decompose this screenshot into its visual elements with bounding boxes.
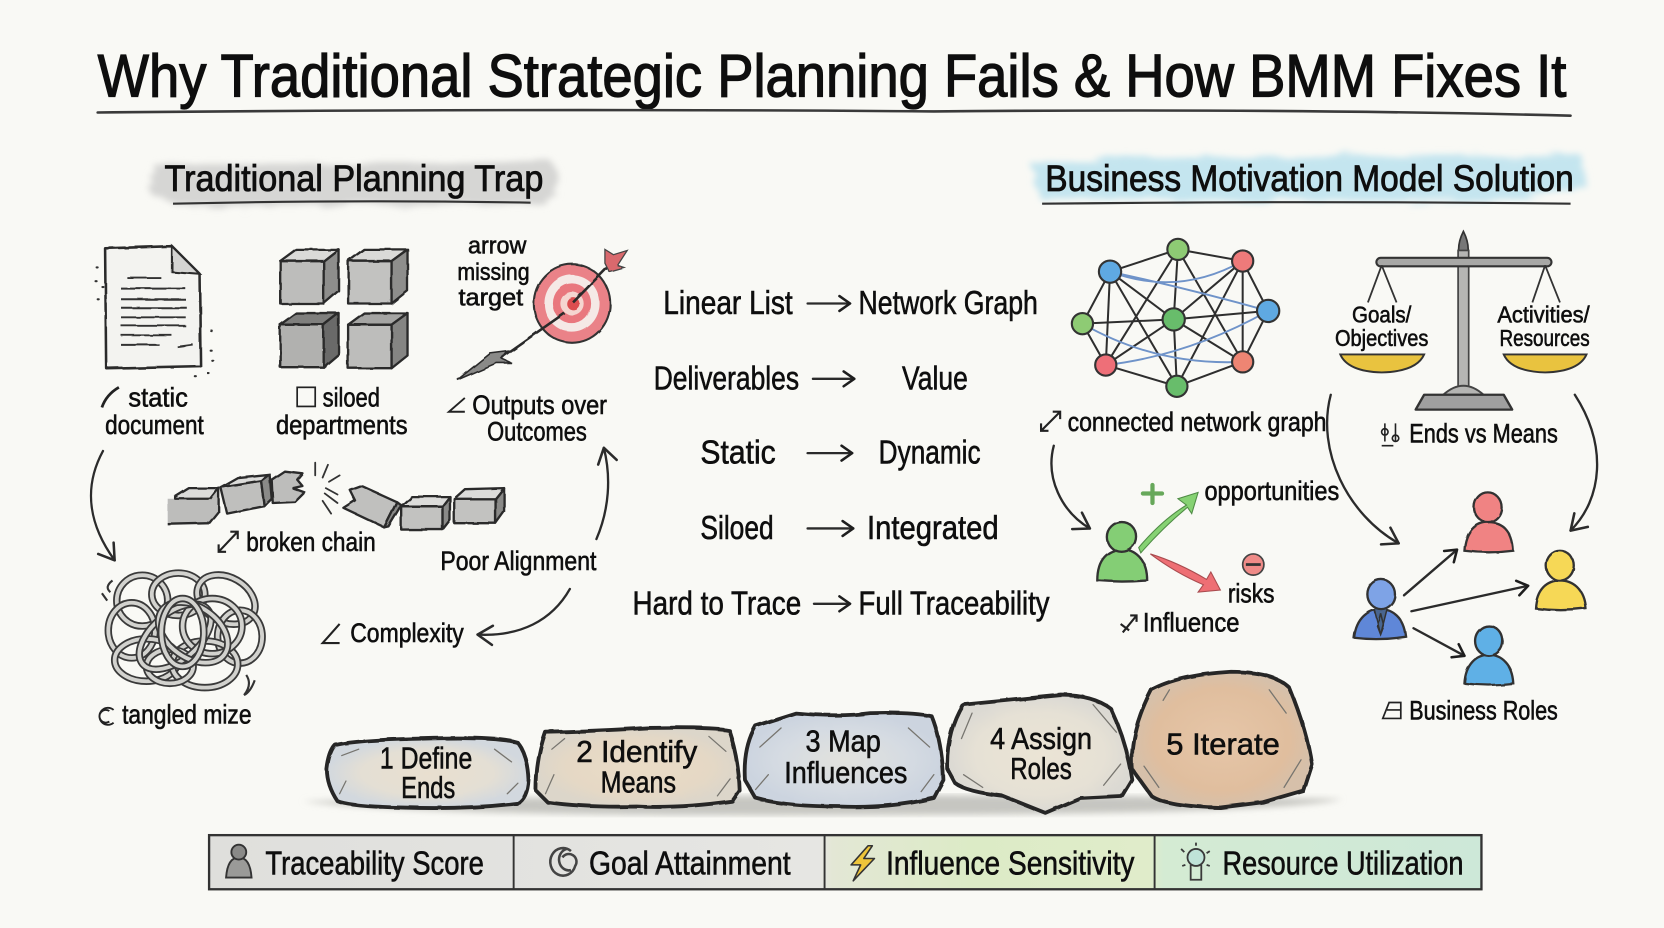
arrow: opportunities <box>1139 492 1198 553</box>
row: Linear List to Network Graph: Linear List <box>663 284 793 321</box>
stone: 4 Assign Roles: Roles <box>1010 751 1072 786</box>
label: siloed departments: siloed <box>323 382 380 412</box>
row: Hard to Trace to Full Traceability <box>632 584 1050 621</box>
label: business roles: Business Roles <box>1409 695 1558 725</box>
icon: blue role <box>1464 626 1513 685</box>
icon: plus <box>1143 485 1162 503</box>
stone: 5 Iterate <box>1132 672 1312 808</box>
heading: Business Motivation Model Solution: Business Motivation Model Solution <box>1045 157 1574 199</box>
metric: Influence Sensitivity: Influence Sensitivity <box>886 844 1135 881</box>
label: broken chain: broken chain <box>246 527 376 557</box>
icon: siloed departments cubes <box>280 249 408 368</box>
stone: 2 Identify Means: 2 Identify <box>576 734 698 769</box>
arrow: risks <box>1150 554 1220 592</box>
panel: comparison list <box>632 284 1050 621</box>
icon: red role <box>1464 492 1513 552</box>
arrow: poor alignment to complexity <box>478 589 570 635</box>
row: Siloed to Integrated: Integrated <box>867 509 999 546</box>
panel: traditional planning trap <box>91 233 627 730</box>
heading: Traditional Planning Trap: Traditional Planning Trap <box>165 157 543 199</box>
stone: 3 Map Influences <box>745 713 943 807</box>
label: goals and objectives <box>1335 302 1428 351</box>
label: activities and resources <box>1497 302 1590 351</box>
label: influence: Influence <box>1143 607 1239 637</box>
label: outputs over outcomes: Outputs over <box>472 390 607 420</box>
label: opportunities: opportunities <box>1204 476 1339 506</box>
icon: minus <box>1243 554 1264 575</box>
label: goals and objectives: Objectives <box>1335 325 1428 351</box>
label: static document <box>102 382 204 440</box>
stone: 3 Map Influences: 3 Map <box>805 723 881 758</box>
stone: 2 Identify Means <box>536 728 740 807</box>
label: tangled maze: tangled mize <box>122 700 252 730</box>
label: siloed departments <box>276 382 408 440</box>
icon: target with arrow <box>457 249 627 380</box>
label: arrow missing target: arrow <box>468 233 527 260</box>
arrows: owner to roles <box>1404 550 1528 656</box>
row: Deliverables to Value: Value <box>902 359 968 396</box>
label: siloed departments: departments <box>276 410 408 440</box>
label: activities and resources: Activities/ <box>1497 302 1590 328</box>
row: Deliverables to Value <box>654 359 968 396</box>
label: connected network graph: connected network graph <box>1068 407 1327 437</box>
row: Static to Dynamic: Dynamic <box>879 434 981 471</box>
panel: business motivation model solution <box>1041 231 1597 725</box>
stone: 5 Iterate: 5 Iterate <box>1166 726 1280 761</box>
metric: Resource Utilization: Resource Utilization <box>1223 844 1463 881</box>
row: Hard to Trace to Full Traceability: Full Traceability <box>859 584 1050 621</box>
stone: 1 Define Ends <box>327 738 529 808</box>
metric: Goal Attainment: Goal Attainment <box>589 844 791 881</box>
ground shadow <box>302 795 1342 815</box>
stone: 3 Map Influences: Influences <box>784 755 907 790</box>
label: arrow missing target <box>457 233 530 312</box>
icon: business owner <box>1354 579 1406 639</box>
stone: 1 Define Ends: 1 Define <box>380 740 472 775</box>
chart: connected network graph <box>1072 239 1279 397</box>
icon: static document <box>96 246 213 377</box>
label: arrow missing target: missing <box>457 259 530 286</box>
row: Siloed to Integrated <box>700 509 999 546</box>
label: goals and objectives: Goals/ <box>1352 302 1412 328</box>
metric: Traceability Score: Traceability Score <box>265 844 484 881</box>
icon: yellow role <box>1536 551 1585 610</box>
panel: metrics bar <box>209 835 1481 889</box>
row: Linear List to Network Graph: Network Graph <box>859 284 1038 321</box>
stone: 4 Assign Roles <box>948 695 1132 813</box>
panel: stepping stones <box>302 672 1342 815</box>
label: complexity: Complexity <box>350 618 464 648</box>
label: static document: static <box>128 382 188 412</box>
label: activities and resources: Resources <box>1499 325 1590 351</box>
icon: broken chain <box>168 471 504 530</box>
label: arrow missing target: target <box>458 285 523 312</box>
label: poor alignment: Poor Alignment <box>440 546 597 576</box>
row: Static to Dynamic <box>700 434 981 471</box>
row: Deliverables to Value: Deliverables <box>654 359 799 396</box>
icon: balance scale <box>1340 231 1586 410</box>
stone: 4 Assign Roles: 4 Assign <box>990 721 1092 756</box>
arrow: network to influence <box>1052 446 1090 528</box>
icon: break sparks <box>315 463 340 514</box>
row: Static to Dynamic: Static <box>700 434 776 471</box>
label: static document: document <box>105 410 204 440</box>
arrow: poor alignment to outcomes <box>596 448 608 539</box>
icon: influencer person <box>1097 522 1147 582</box>
stone: 2 Identify Means: Means <box>601 765 676 800</box>
row: Linear List to Network Graph <box>663 284 1038 321</box>
label: outputs over outcomes <box>449 390 607 446</box>
metric: Resource Utilization <box>1181 843 1463 881</box>
stone: 1 Define Ends: Ends <box>401 770 455 805</box>
icon: tangled maze <box>102 565 264 695</box>
label: outputs over outcomes: Outcomes <box>487 416 587 446</box>
row: Siloed to Integrated: Siloed <box>700 509 774 546</box>
arrow: scale to yellow role <box>1571 395 1597 531</box>
label: risks: risks <box>1228 579 1275 609</box>
label: ends vs means: Ends vs Means <box>1409 419 1558 449</box>
row: Hard to Trace to Full Traceability: Hard to Trace <box>632 584 801 621</box>
arrow: document to tangled maze <box>91 451 115 560</box>
arrow: scale to business owner <box>1327 395 1399 543</box>
